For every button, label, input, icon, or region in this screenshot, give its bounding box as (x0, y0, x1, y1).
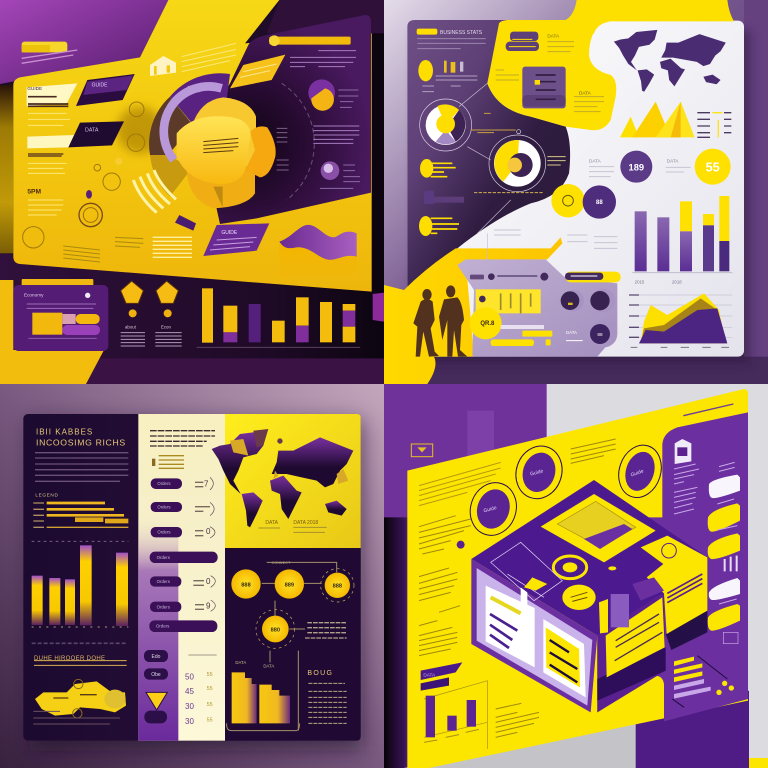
text right of node (305, 623, 347, 638)
right column pills (708, 462, 740, 644)
bar chart right: 2015 (635, 280, 645, 285)
number column: 55 (207, 717, 213, 723)
panel text (674, 464, 699, 514)
heading: section: DUHE HIROOER DOHE (34, 656, 105, 662)
background band: upper purple (0, 0, 168, 84)
node circles (231, 569, 354, 648)
pill list: 0 (206, 527, 211, 536)
lower pills and triangle (144, 650, 217, 723)
number column: 55 (207, 702, 213, 708)
top bar with dot (269, 35, 351, 46)
horizontal bar chart (33, 493, 128, 527)
number column: 30 (185, 717, 194, 726)
pill list: Orders (156, 623, 169, 628)
text top centre (150, 431, 215, 446)
icon cluster: line icons (23, 102, 145, 248)
panel: top-right map dashboard (384, 0, 768, 384)
bar chart right (632, 196, 732, 285)
main yellow sheet (13, 0, 372, 292)
pill list: Orders (157, 579, 170, 584)
callout: left upper white: GUIDE (27, 86, 42, 91)
text line top right (683, 404, 733, 416)
pill list: Orders (157, 504, 171, 509)
stat circle 55: 55 (706, 160, 720, 174)
panel: top-left abstract dashboard (0, 0, 384, 384)
bottom left pills: DATA (423, 673, 436, 678)
text: right block: BOUG (307, 670, 333, 677)
world map (614, 30, 726, 92)
panel: bottom-right isometric box (384, 384, 768, 768)
face circles: 88 (597, 332, 603, 337)
pill list: Orders (157, 555, 170, 560)
circle badges: Guide (530, 468, 544, 478)
blurred shadow around centre (117, 107, 163, 153)
badge icons: Econ (161, 324, 171, 329)
centre cream column (138, 414, 225, 741)
circle badges: Guide (630, 468, 645, 479)
hexagon chain (33, 679, 126, 724)
callout: left lower: DATA (85, 127, 99, 133)
stacked bars icon (672, 656, 734, 707)
text block right (313, 126, 359, 143)
text blocks on yellow (28, 113, 70, 215)
small text under circles (494, 230, 617, 248)
connector diagram: CONNECT (272, 561, 290, 565)
node circles: 889 (285, 582, 294, 588)
small chart upper left (418, 60, 477, 92)
cube white cards (486, 586, 535, 667)
mountain chart (620, 102, 695, 137)
mini bullet (159, 456, 184, 468)
bottom text (496, 703, 539, 737)
lavender panel contents: DATA (566, 330, 577, 335)
pill list: Orders (157, 529, 171, 534)
key list right (697, 113, 731, 137)
pill list: 7 (204, 480, 209, 489)
overlapping circles (551, 184, 616, 219)
number column: 50 (185, 672, 194, 681)
small bubble (320, 161, 360, 188)
number column: 45 (185, 687, 194, 696)
header (417, 29, 486, 49)
dark left shape (407, 20, 570, 290)
lavender panel contents: QR.8 (480, 321, 495, 327)
building icon (675, 439, 691, 464)
overlapping circles: 88 (596, 200, 603, 206)
number column: 55 (207, 686, 213, 692)
dashed arc on dark panel (282, 83, 314, 200)
pie icon (308, 79, 358, 111)
medal icon (79, 190, 102, 227)
heading: section (34, 656, 127, 665)
lower pills and triangle: Edo (152, 654, 161, 660)
body text (35, 453, 128, 481)
3D yellow sphere (177, 97, 276, 208)
world map: DATA 2018 (293, 520, 318, 526)
stat circle 55 (666, 149, 731, 185)
small dark label near sphere (277, 128, 289, 170)
node circles: 888 (333, 584, 342, 590)
shaded list cards on yellow (496, 32, 604, 112)
vertical bar chart (32, 541, 128, 643)
badge icons (121, 281, 182, 346)
stepped chart: DATA (235, 660, 246, 665)
lower pills and triangle: Obe (151, 672, 161, 678)
icon: people silhouettes (413, 285, 467, 357)
bottom left pills (421, 662, 462, 691)
title: INCOOSIMG RICHS (36, 437, 126, 447)
text block: upper yellow stripe (182, 43, 236, 72)
lavender panel contents (470, 272, 621, 346)
corner badge (411, 444, 433, 457)
bottom-left purple card (13, 279, 108, 351)
stat circle 189: DATA (589, 159, 602, 164)
isometric cube (471, 480, 707, 712)
title bar (22, 42, 77, 63)
radial segments (149, 73, 230, 197)
number column: 30 (185, 702, 194, 711)
card shadow (414, 30, 751, 363)
text: right block (307, 670, 347, 723)
stepped chart (227, 660, 299, 731)
yellow sheet (407, 389, 748, 768)
connector diagram (262, 561, 337, 731)
header: BUSINESS STATS (440, 30, 483, 36)
blueprint lines (491, 542, 562, 601)
main white card (407, 21, 744, 357)
yellow callout top (230, 55, 285, 88)
number column: 55 (207, 672, 213, 678)
text block on purple top right (290, 51, 356, 67)
radial segments: dile (183, 83, 203, 98)
area chart (629, 293, 732, 347)
lavender panel (457, 259, 617, 357)
right purple panel (597, 412, 748, 721)
donut chart centre (489, 135, 566, 192)
callout: left lower (27, 121, 124, 156)
yellow shape lower left (384, 237, 562, 384)
stepped chart: DATA (263, 663, 274, 668)
dark purple panel (200, 15, 371, 224)
pill list: 0 (206, 577, 211, 586)
world map (212, 429, 353, 532)
yellow map panel (225, 414, 361, 548)
stripes arcs (133, 170, 176, 213)
ring icon (553, 556, 587, 579)
callout: left upper white (27, 74, 135, 106)
text blocks lower (63, 237, 143, 262)
world map: DATA (265, 520, 279, 526)
pill list: Orders (157, 481, 171, 486)
node circles: 880 (271, 627, 280, 633)
stat circle 55: DATA (667, 159, 679, 164)
left text blocks (419, 462, 501, 506)
connector lines (459, 83, 511, 260)
circle badges (464, 440, 668, 541)
purple callout bottom: GUIDE (221, 230, 238, 236)
horizontal bar chart: LEGEND (35, 493, 58, 498)
badge icons: about (125, 324, 137, 329)
node circles: 888 (241, 582, 251, 588)
shaded list cards on yellow: DATA (547, 33, 560, 38)
callout: left upper white: GUIDE (92, 83, 108, 89)
pill list: 9 (206, 602, 211, 611)
circle badges: Guide (483, 505, 498, 514)
face circles (561, 289, 617, 347)
side bullet items (419, 159, 544, 236)
dot (457, 541, 465, 549)
top yellow shape (557, 0, 734, 40)
yellow shape upper centre (487, 20, 616, 130)
bottom-left purple card: Economy (24, 293, 44, 298)
pill list: Orders (157, 604, 170, 609)
purple callout bottom (203, 223, 269, 256)
wave chart (279, 225, 357, 277)
bottom bar chart (424, 681, 487, 749)
building icon (150, 56, 176, 76)
title: IBII KABBES (36, 428, 93, 437)
dark card (23, 414, 361, 741)
bar chart (197, 288, 360, 347)
title (36, 428, 126, 447)
number column (185, 672, 213, 726)
lower right dark (225, 548, 361, 741)
bottom-left yellow wedge (0, 280, 104, 384)
label: 5PM: 5PM (27, 188, 41, 195)
panel: bottom-left dark dashboard (0, 384, 384, 768)
cube top card (541, 494, 656, 562)
stat circle 189: 189 (629, 162, 644, 172)
donut chart left (420, 99, 521, 151)
purple slanted tag (175, 215, 196, 231)
shaded list cards on yellow: DATA (579, 90, 592, 95)
pill list (149, 477, 218, 632)
stat circle 189 (589, 151, 652, 183)
bar chart right: 2018 (672, 280, 682, 285)
